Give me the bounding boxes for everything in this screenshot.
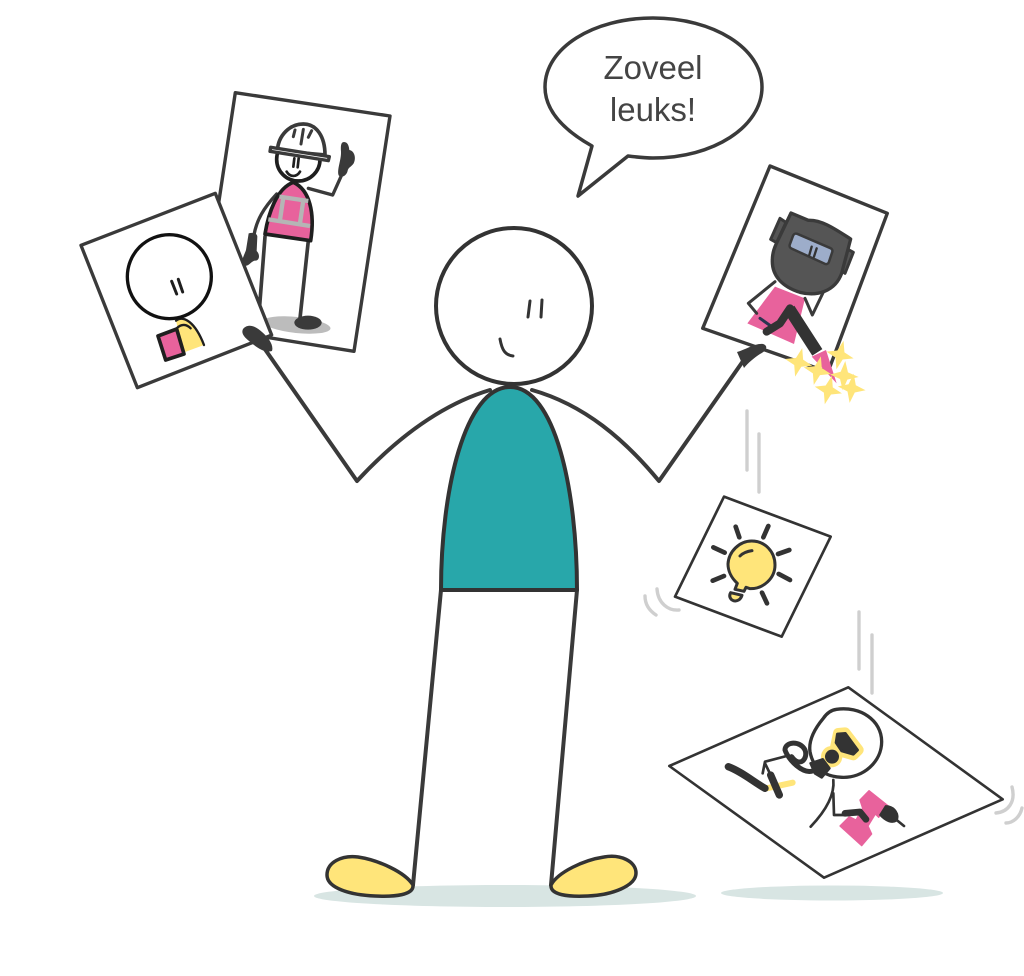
motion arcs by drill card — [996, 787, 1022, 823]
card sheet — [703, 166, 887, 372]
head — [436, 228, 592, 384]
arms — [748, 282, 828, 315]
pink object — [158, 329, 184, 360]
head — [810, 709, 882, 777]
visor — [793, 237, 829, 261]
hose — [785, 743, 813, 771]
yellow shoulder — [176, 319, 204, 353]
left hand — [242, 326, 272, 352]
torso with vest — [265, 182, 312, 241]
floor shadow — [262, 313, 331, 337]
worker figure — [242, 124, 355, 337]
welder figure — [747, 213, 868, 408]
head — [127, 235, 211, 319]
arms — [254, 175, 342, 235]
bulb rays — [713, 526, 790, 603]
drill head — [880, 806, 898, 822]
left foot — [327, 857, 413, 896]
yellow grip — [767, 783, 793, 788]
card sheet — [200, 93, 390, 351]
neck blob — [811, 759, 829, 777]
bulb — [728, 541, 775, 591]
ground shadow under falling card — [721, 886, 943, 900]
card: welder — [703, 166, 887, 408]
ground shadow under figure — [314, 885, 696, 907]
right arm — [532, 354, 748, 481]
right foot — [551, 856, 636, 896]
card: falling drill worker — [669, 687, 1003, 878]
smile — [500, 339, 513, 356]
lowered glove — [242, 233, 259, 266]
black mask — [836, 733, 858, 754]
torch tip — [812, 350, 837, 383]
main figure — [242, 228, 766, 896]
legs — [259, 237, 308, 318]
helmet side straps — [771, 218, 853, 273]
card: worker with hard hat — [200, 93, 390, 351]
drill worker figure — [728, 709, 904, 846]
head — [277, 138, 320, 181]
motion arcs by light bulb card — [645, 589, 679, 615]
hard hat — [277, 124, 325, 155]
torch arm — [760, 318, 775, 329]
card sheet — [669, 687, 1003, 878]
right hand — [737, 344, 766, 368]
card: light bulb — [675, 497, 831, 637]
speech bubble — [545, 18, 762, 196]
motion lines above falling cards — [747, 411, 872, 693]
sparks — [782, 337, 868, 408]
body — [747, 287, 805, 344]
arm and tool — [763, 756, 787, 775]
left arm — [262, 345, 490, 481]
legs — [413, 590, 577, 885]
foot — [294, 316, 322, 330]
yellow mask — [833, 733, 858, 757]
welding helmet — [772, 213, 851, 294]
body — [811, 780, 848, 827]
raised glove — [338, 142, 355, 177]
pink drill — [840, 791, 888, 846]
card: person with pink object — [81, 193, 272, 388]
gripping hand — [845, 812, 866, 819]
eyes — [528, 300, 542, 317]
speech text: Zoveel — [603, 49, 703, 86]
speech text line 2: leuks! — [610, 91, 696, 128]
torso — [441, 387, 577, 590]
